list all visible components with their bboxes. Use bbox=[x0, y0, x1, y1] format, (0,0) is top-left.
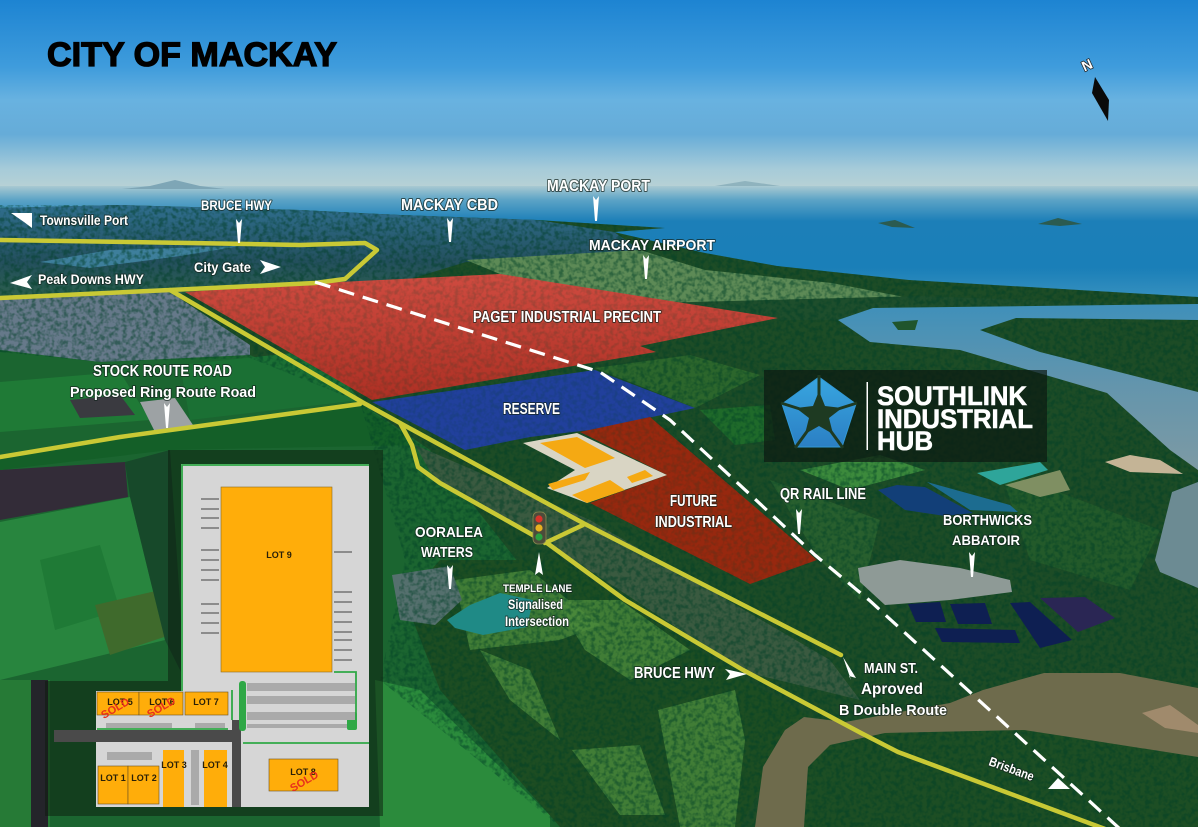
vegetation texture bbox=[0, 205, 1198, 827]
label: Peak Downs Hwy: Peak Downs HWY bbox=[38, 271, 145, 287]
label: Mackay CBD: MACKAY CBD bbox=[401, 197, 498, 214]
lot 8: SOLD bbox=[288, 769, 321, 795]
label: QR Rail Line: QR RAIL LINE bbox=[780, 486, 866, 503]
quarry bbox=[1105, 455, 1183, 474]
access roads bbox=[54, 720, 241, 807]
western farmland bbox=[0, 350, 620, 827]
lot 6 bbox=[139, 692, 183, 721]
lot 4: LOT 4 bbox=[202, 760, 228, 770]
fairways bbox=[455, 570, 745, 827]
roads: Bruce Highway and connectors bbox=[0, 240, 1105, 827]
loading docks left bbox=[201, 498, 219, 634]
zone: Reserve bbox=[372, 370, 695, 450]
lot 7 bbox=[185, 692, 228, 715]
label: Mackay CBD bbox=[401, 197, 498, 242]
treatment ponds bbox=[908, 597, 1115, 648]
car park rows bbox=[106, 683, 355, 805]
lower river bbox=[1155, 482, 1198, 588]
logo: Southlink Industrial Hub: INDUSTRIAL bbox=[877, 404, 1033, 434]
label: Brisbane: Brisbane bbox=[987, 754, 1036, 784]
lot 9: LOT 9 bbox=[266, 550, 292, 560]
label: Stock Route Road: Proposed Ring Route Road bbox=[70, 385, 256, 401]
label: Peak Downs Hwy bbox=[10, 271, 145, 289]
quarry ponds bbox=[878, 462, 1070, 516]
label: Borthwicks Abbatoir: BORTHWICKS bbox=[943, 512, 1032, 529]
label: Ooralea Waters bbox=[415, 524, 483, 589]
label: Bruce Hwy north: BRUCE HWY bbox=[201, 197, 273, 213]
airport plain bbox=[466, 250, 920, 303]
label: Ooralea Waters: OORALEA bbox=[415, 524, 483, 541]
label: Temple Lane signalised intersection bbox=[503, 552, 572, 629]
zone: Future Industrial bbox=[580, 417, 817, 584]
label: Mackay Airport bbox=[589, 238, 715, 279]
lot 7: LOT 7 bbox=[193, 697, 219, 707]
label: Mackay Port bbox=[547, 178, 650, 221]
label: Temple Lane signalised intersection: TEMPLE LANE bbox=[503, 583, 572, 595]
coastal scrub bbox=[654, 296, 1198, 320]
site boundary planting bbox=[97, 465, 369, 743]
abattoir buildings bbox=[858, 560, 1012, 605]
western residential area bbox=[0, 292, 250, 362]
label: Ooralea Waters: WATERS bbox=[421, 544, 473, 561]
label: Townsville Port bbox=[11, 213, 128, 228]
label: Main St B Double Route: Aproved bbox=[861, 681, 923, 698]
lot 6: SOLD bbox=[145, 695, 178, 721]
north arrow bbox=[1079, 56, 1109, 121]
southern river bbox=[755, 673, 1198, 827]
farm fields bbox=[0, 350, 550, 827]
river sandbank bbox=[1142, 705, 1198, 733]
label: Temple Lane signalised intersection: Intersection bbox=[505, 614, 569, 629]
lot 3: LOT 3 bbox=[161, 760, 187, 770]
label: Mackay Port: MACKAY PORT bbox=[547, 178, 650, 195]
label: Townsville Port: Townsville Port bbox=[40, 213, 128, 228]
lot 3 bbox=[161, 750, 187, 807]
label: Temple Lane signalised intersection: Signalised bbox=[508, 597, 563, 612]
upper river bbox=[838, 304, 1198, 470]
farm strip road bbox=[31, 680, 48, 827]
label: Paget Industrial Precinct: PAGET INDUSTRIAL PRECINT bbox=[473, 309, 661, 326]
label: Brisbane bbox=[987, 754, 1070, 789]
site ground bbox=[96, 464, 369, 807]
icon: traffic light bbox=[533, 512, 546, 544]
label: Future Industrial: INDUSTRIAL bbox=[655, 514, 732, 531]
icon: blue pentagon star bbox=[781, 375, 857, 448]
lot 1 bbox=[98, 766, 128, 804]
label: Main St B Double Route: MAIN ST. bbox=[864, 660, 918, 677]
label: Bruce Hwy north bbox=[201, 197, 273, 243]
label: Main St B Double Route bbox=[839, 657, 947, 719]
lot 5: LOT 5 bbox=[107, 697, 133, 707]
eastern paddocks bbox=[595, 355, 760, 408]
distant islands bbox=[122, 180, 1082, 228]
loading docks right bbox=[334, 551, 352, 661]
label: Bruce Hwy south: BRUCE HWY bbox=[634, 665, 716, 682]
logo: Southlink Industrial Hub: HUB bbox=[877, 426, 933, 456]
zone: Paget Industrial Precinct bbox=[185, 274, 778, 400]
label: Stock Route Road bbox=[70, 363, 256, 428]
zone texture bbox=[180, 270, 820, 590]
label: QR Rail Line bbox=[780, 486, 866, 534]
inset site plan bbox=[45, 450, 383, 816]
southern bank bbox=[804, 730, 1198, 827]
ooralea waters lake bbox=[447, 593, 533, 635]
lot 6: LOT 6 bbox=[149, 697, 175, 707]
lot 4 bbox=[202, 750, 228, 807]
label: Reserve: RESERVE bbox=[503, 401, 560, 418]
lot 2: LOT 2 bbox=[131, 773, 157, 783]
label: Stock Route Road: STOCK ROUTE ROAD bbox=[93, 363, 232, 380]
label: Main St B Double Route: B Double Route bbox=[839, 702, 947, 719]
northern suburbs bbox=[0, 205, 640, 300]
sky bbox=[0, 0, 1198, 192]
golf course bbox=[405, 560, 860, 827]
label: Future Industrial bbox=[655, 493, 732, 531]
label: Borthwicks Abbatoir bbox=[943, 512, 1032, 577]
logo: Southlink Industrial Hub: SOUTHLINK bbox=[877, 381, 1027, 411]
land base bbox=[0, 205, 1198, 827]
creek bbox=[40, 246, 240, 268]
title: CITY OF MACKAY bbox=[47, 36, 337, 74]
river island bbox=[892, 320, 918, 330]
Temple Lane neighbourhood bbox=[392, 566, 462, 625]
lot 8 bbox=[269, 759, 338, 795]
lot 5: SOLD bbox=[99, 696, 132, 722]
north arrow: N bbox=[1079, 56, 1095, 74]
label: Mackay Airport: MACKAY AIRPORT bbox=[589, 238, 715, 254]
label: Borthwicks Abbatoir: ABBATOIR bbox=[952, 532, 1020, 548]
QR rail line bbox=[315, 282, 1120, 827]
suburban strip bbox=[415, 445, 860, 700]
inset dark backing bbox=[45, 450, 383, 816]
landscaped islands bbox=[239, 681, 357, 731]
lot 1: LOT 1 bbox=[100, 773, 126, 783]
sea bbox=[0, 186, 1198, 303]
lot 5 bbox=[97, 692, 139, 722]
logo: Southlink Industrial Hub bbox=[764, 370, 1047, 462]
lot 8: LOT 8 bbox=[290, 767, 316, 777]
lot 9 bbox=[221, 487, 332, 672]
lot 2 bbox=[128, 766, 159, 804]
label: Future Industrial: FUTURE bbox=[670, 493, 717, 510]
mini site plan on the map bbox=[523, 433, 667, 503]
label: City Gate: City Gate bbox=[194, 259, 251, 275]
